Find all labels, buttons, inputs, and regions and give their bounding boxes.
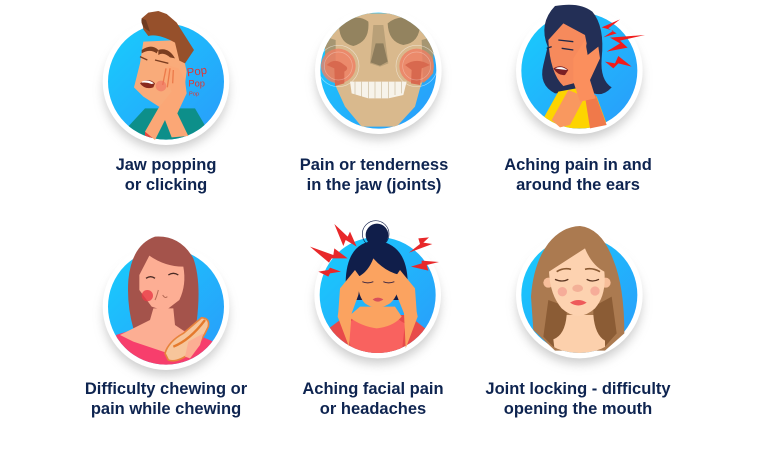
panel: joint locking	[485, 226, 671, 418]
panel: jaw popping or clicking	[103, 11, 229, 194]
panel: aching pain in and around the ears	[504, 5, 652, 194]
icon: woman holding ear with red pain bolts	[516, 5, 645, 139]
icon: skull with highlighted jaw joints	[315, 7, 442, 139]
caption: Joint locking - difficulty	[485, 380, 671, 398]
icon: sad long-haired woman	[516, 226, 643, 364]
panel: difficulty chewing	[85, 237, 248, 418]
panel: aching facial pain or headaches: or headaches	[320, 400, 426, 418]
panel: aching pain in and around the ears: around the ears	[516, 176, 640, 194]
icon: pain bolts	[310, 224, 357, 277]
icon: man holding jaw with pop sounds: Pop	[189, 91, 199, 97]
icon: man holding jaw with pop sounds	[103, 11, 229, 150]
caption: Aching facial pain	[302, 380, 444, 398]
panel: joint locking: opening the mouth	[504, 400, 652, 418]
infographic: jaw disorder symptoms	[86, 4, 670, 418]
icon: woman holding head with pain bolts	[310, 221, 441, 364]
teeth	[350, 82, 407, 98]
panel: pain or tenderness in the jaw: in the jaw (joints)	[307, 176, 441, 194]
panel: pain or tenderness in the jaw	[300, 7, 448, 194]
panel: aching facial pain or headaches	[302, 221, 444, 418]
icon: pain bolts	[602, 19, 620, 37]
panel: jaw popping or clicking: or clicking	[125, 176, 207, 194]
caption: Pain or tenderness	[300, 156, 448, 174]
caption: Aching pain in and	[504, 156, 652, 174]
icon: hot dog	[165, 318, 209, 361]
icon: man holding jaw with pop sounds: Pop	[186, 65, 208, 79]
icon: man holding jaw with pop sounds: Pop	[188, 79, 205, 89]
caption: Difficulty chewing or	[85, 380, 248, 398]
caption: Jaw popping	[116, 156, 216, 174]
icon: woman chewing a hot dog	[103, 237, 229, 375]
panel: difficulty chewing: pain while chewing	[91, 400, 241, 418]
